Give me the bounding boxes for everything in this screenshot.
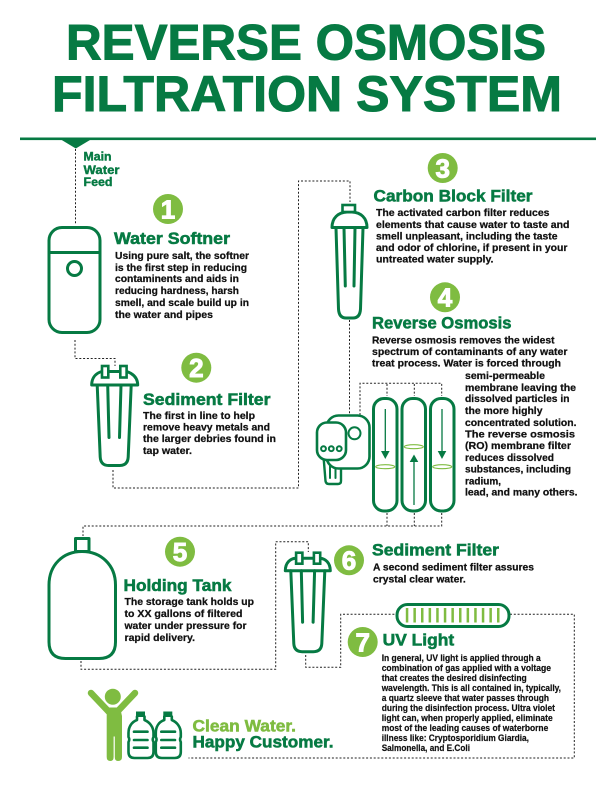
step 4 badge [430,282,460,313]
step 2 badge: 2 [189,353,204,383]
text: reverse osmosis description: Reverse osmosis removes the widest [372,336,555,347]
text: carbon block filter description [376,208,570,266]
label: main water feed [84,150,120,189]
heading: second sediment filter: Sediment Filter [372,540,499,559]
title: FILTRATION SYSTEM [52,66,562,122]
text: reverse osmosis description [372,336,578,499]
heading: holding tank: Holding Tank [124,576,232,595]
connector: RO unit to membranes [360,383,442,415]
icon: membrane tube 1 [374,398,397,511]
text: UV light description: In general, UV light is applied through a [382,653,541,663]
tagline: Happy Customer. [192,733,334,752]
text: UV light description: a quartz sleeve that water passes through [382,693,549,703]
connector: second filter to UV lamp [306,614,396,667]
connector: feed to softener [74,149,76,224]
step 4 badge: 4 [438,283,453,313]
text: UV light description: wavelength. This is all contained in, typically, [381,683,561,693]
icon: happy customer figure [91,689,135,761]
text: sediment filter description: tap water. [143,446,192,457]
text: reverse osmosis description: The reverse osmosis [465,430,575,441]
step 5 badge [165,537,195,567]
step 3 badge [428,153,458,183]
text: holding tank description: rapid delivery. [124,633,195,644]
text: reverse osmosis description: membrane leaving the [465,383,576,394]
text: water softner description: contaminents and aids in [115,274,239,285]
connector: membranes to holding tank [83,513,442,536]
text: reverse osmosis description: reduces dissolved [465,453,554,464]
text: UV light description: combination of gas applied with a voltage [382,663,551,673]
text: carbon block filter description: smell unpleasant, including the taste [376,232,558,242]
icon: membrane tube 3 [430,398,454,511]
connector: carbon filter to RO unit [348,320,350,415]
text: reverse osmosis description: lead, and many others. [465,488,578,499]
text: holding tank description: water under pressure for [123,621,246,632]
step 7 badge [348,627,378,657]
text: UV light description: that creates the desired disinfecting [382,673,527,683]
step 5 badge: 5 [173,537,187,567]
text: water softner description: smell, and scale build up in [115,298,249,309]
text: sediment filter description [143,411,276,457]
icon: sediment filter [92,366,138,466]
text: second sediment filter description [373,563,534,586]
text: reverse osmosis description: (RO) membrane filter [465,441,571,452]
text: sediment filter description: the larger debries found in [143,434,276,445]
text: second sediment filter description: A second sediment filter assures [373,563,534,574]
text: UV light description: most of the leading causes of waterborne [382,723,548,733]
step 6 badge: 6 [342,546,356,576]
text: UV light description [381,653,561,753]
icon: water bottles [128,712,181,758]
text: holding tank description [123,597,254,644]
icon: carbon block filter [332,205,367,318]
step 1 badge [153,194,183,224]
label: main water feed: Water [84,163,120,177]
text: water softner description: reducing hardness, harsh [115,286,239,297]
text: reverse osmosis description: substances, including [465,465,571,476]
text: carbon block filter description: The activated carbon filter reduces [376,208,550,219]
connector: holding tank to second filter [81,542,308,669]
text: sediment filter description: The first in line to help [143,411,255,422]
heading: reverse osmosis: Reverse Osmosis [372,313,512,332]
connector: sediment filter to carbon filter [113,181,350,488]
step 6 badge [334,545,364,576]
icon: water softener tank [49,228,100,332]
step 1 badge: 1 [161,194,175,224]
text: water softner description: Using pure salt, the softner [115,251,249,262]
title: REVERSE OSMOSIS [66,14,546,70]
text: second sediment filter description: crystal clear water. [373,575,466,586]
text: sediment filter description: remove heavy metals and [143,422,270,434]
title [52,14,562,122]
text: reverse osmosis description: treat process. Water is forced through [372,359,561,370]
text: UV light description: Salmonella, and E.Coli [382,743,470,753]
icon: UV lamp [397,604,509,626]
step 2 badge [181,353,211,383]
heading: water softner: Water Softner [114,229,230,248]
label: main water feed: Feed [84,175,112,189]
text: reverse osmosis description: radium, [465,476,501,487]
connector: UV lamp to clean water [188,614,574,758]
heading: sediment filter: Sediment Filter [143,390,271,409]
text: reverse osmosis description: the more highly [465,406,543,417]
step 7 badge: 7 [355,627,370,657]
step 3 badge: 3 [435,153,450,183]
text: UV light description: during the disinfection process. Ultra violet [382,703,555,713]
text: water softner description: is the first step in reducing [115,263,247,274]
header rule with feed marker [20,138,596,148]
text: carbon block filter description: elements that cause water to taste and [376,220,570,231]
text: holding tank description: The storage tank holds up [124,597,254,608]
tagline [192,717,334,752]
text: reverse osmosis description: dissolved particles in [465,394,570,405]
text: reverse osmosis description: semi-permeable [465,371,545,382]
text: water softner description: the water and pipes [115,310,213,321]
text: carbon block filter description: untreated water supply. [376,255,494,266]
heading: UV light: UV Light [383,631,455,650]
icon: second sediment filter [285,553,330,652]
text: UV light description: illness like: Cryptosporidium Giardia, [382,733,529,743]
icon: RO pump unit [317,416,370,484]
text: UV light description: light can, when properly applied, eliminate [382,713,553,723]
text: reverse osmosis description: concentrated solution. [465,418,577,429]
heading: carbon block filter: Carbon Block Filter [374,187,533,206]
tagline: Clean Water. [192,717,296,736]
icon: membrane tube 2 [402,398,426,511]
text: water softner description [115,251,249,321]
connector: softener to sediment filter [75,340,115,366]
text: reverse osmosis description: spectrum of contaminants of any water [372,347,568,358]
label: main water feed: Main [84,150,112,164]
text: holding tank description: to XX gallons of filtered [124,609,242,620]
icon: holding tank [49,538,116,658]
text: carbon block filter description: and odor of chlorine, if present in your [376,243,568,254]
